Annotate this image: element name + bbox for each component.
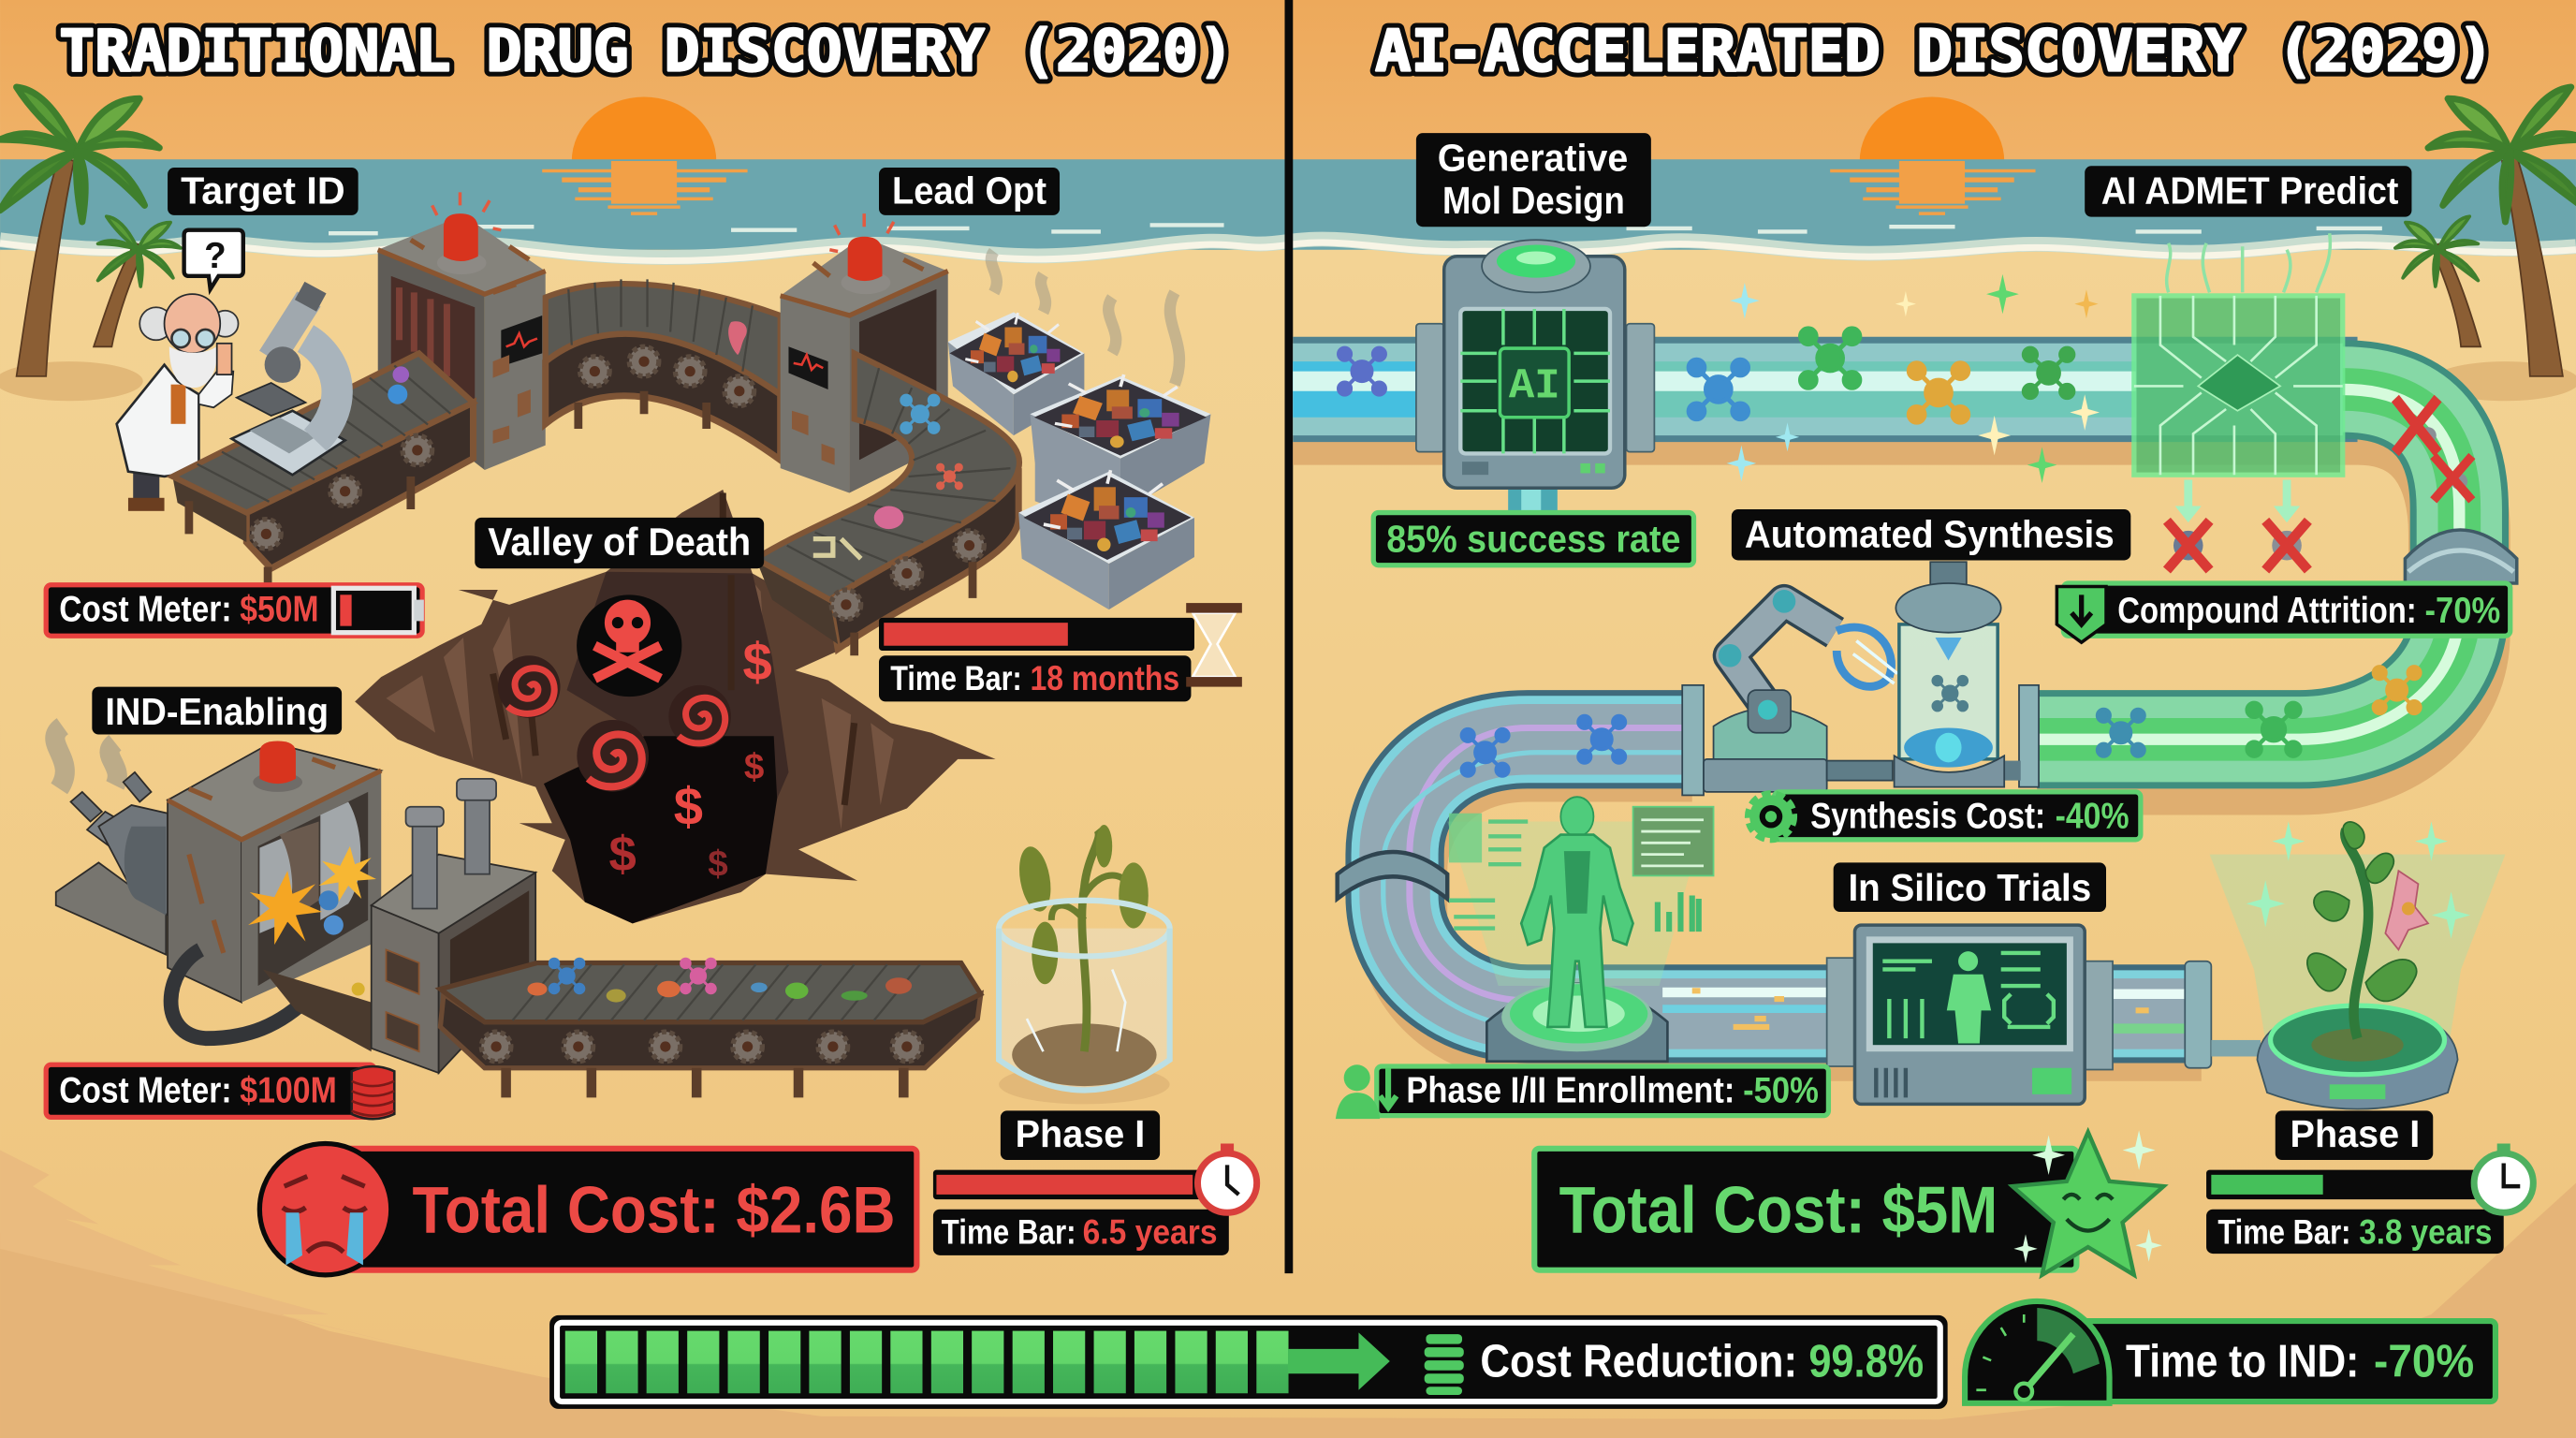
stat: synthesis cost: -40% (2056, 797, 2130, 837)
conveyor: bottom belt (440, 959, 981, 1097)
icon: dollar signs: $ (674, 777, 703, 836)
icon: dollar signs (609, 633, 772, 884)
total cost: $2.6B with crying face: Total Cost: $2.6B (413, 1172, 896, 1246)
total cost: $5M with star (1534, 1130, 2163, 1275)
label: Valley of Death: Valley of Death (488, 520, 751, 564)
panel: AI-accelerated discovery (2029) (1293, 18, 2576, 1275)
molecules: second pipe (1462, 667, 2421, 776)
time bar: 3.8 years with stopwatch (2206, 1143, 2533, 1254)
time bar: 3.8 years with stopwatch: 3.8 years (2359, 1213, 2492, 1252)
cost meter: $100M with coins (46, 1064, 394, 1119)
time bar: 18 months with hourglass: Time Bar: (890, 659, 1022, 697)
conveyor: curved third belt (755, 353, 1019, 655)
stat: compound attrition (2056, 583, 2510, 642)
label: AI ADMET Predict: AI ADMET Predict (2101, 169, 2398, 213)
icon: person with down arrow (1336, 1064, 1397, 1119)
panel: traditional drug discovery (2020) (0, 18, 1257, 1275)
time to IND stat with speedometer (1965, 1301, 2496, 1403)
machine: in silico trial monitor (1827, 925, 2113, 1104)
stat: synthesis cost (1749, 792, 2141, 840)
icon: gear (1749, 795, 1793, 838)
total cost: $2.6B with crying face (259, 1143, 916, 1275)
icon: scientist with question bubble (117, 230, 243, 511)
icon: coin stack (1425, 1334, 1464, 1395)
molecules and sparkles in pipe (1339, 274, 2100, 483)
icon: waste bins with smoke (948, 252, 1211, 609)
label: Generative Mol Design: Generative (1438, 137, 1628, 180)
icon: palm trees left (0, 87, 181, 376)
icon: speedometer (1965, 1301, 2110, 1403)
machine: IND-enabling crusher (55, 726, 535, 1073)
cost reduction progress bar: 99.8% (1808, 1337, 1924, 1387)
conveyor: first belt (172, 353, 474, 603)
stat: phase I/II enrollment: -50% (1743, 1071, 1819, 1111)
icon: microscope (232, 287, 345, 475)
pipe flanges (1338, 530, 2517, 1068)
icon: red spirals (498, 655, 731, 792)
time bar: 6.5 years with clock: 6.5 years (1083, 1213, 1218, 1252)
hologram: virtual patient (1447, 797, 1714, 1062)
stat: compound attrition: Compound Attrition: (2117, 591, 2417, 631)
icon: progress arrow (1288, 1332, 1390, 1390)
stat: synthesis cost: Synthesis Cost: (1810, 797, 2045, 837)
stat: phase I/II enrollment (1336, 1064, 1828, 1119)
cost meter: $100M with coins: $100M (240, 1071, 337, 1111)
label: Generative Mol Design (1416, 133, 1651, 227)
time bar: 6.5 years with clock: Time Bar: (942, 1213, 1076, 1252)
cost reduction progress bar: Cost Reduction: (1480, 1337, 1797, 1387)
cost meter: $50M with battery (46, 585, 424, 636)
icon: dollar signs: $ (708, 844, 728, 884)
label: In Silico Trials: In Silico Trials (1848, 866, 2091, 909)
label: Lead Opt: Lead Opt (892, 169, 1046, 213)
pipeline: glass pipe (1293, 381, 2459, 1035)
icon: shield with down arrow (2056, 587, 2106, 642)
icon: palm trees right (2395, 87, 2576, 376)
gate: lead opt machine (781, 213, 948, 493)
icon: crying face (259, 1143, 391, 1275)
title: AI-accelerated: AI-ACCELERATED DISCOVERY (2029) (1375, 18, 2494, 84)
icon: wilted plant in cracked beaker (999, 825, 1170, 1104)
cost meter: $50M with battery: $50M (240, 589, 319, 629)
title: traditional: TRADITIONAL DRUG DISCOVERY (2020) (59, 18, 1234, 84)
label: IND-Enabling: IND-Enabling (105, 690, 329, 733)
total cost: $5M with star: Total Cost: $5M (1559, 1172, 1998, 1246)
icon: smiling star (2012, 1130, 2163, 1275)
icon: dollar signs: $ (609, 827, 637, 882)
title: traditional: TRADITIONAL DRUG DISCOVERY (2020) (59, 18, 1234, 84)
icon: stopwatch red (1197, 1143, 1257, 1212)
cost reduction progress bar (552, 1318, 1945, 1406)
stat: phase I/II enrollment: Phase I/II Enrollment: (1406, 1071, 1734, 1111)
cost meter: $100M with coins: Cost Meter: (59, 1071, 232, 1111)
label: Generative Mol Design: Mol Design (1442, 179, 1625, 222)
icon: healthy plant on glowing platform (2210, 821, 2505, 1109)
icon: dollar signs: $ (743, 633, 772, 692)
label: Automated Synthesis: Automated Synthesis (1745, 512, 2115, 555)
machine: generative AI core: AI (1509, 362, 1560, 411)
time bar: 3.8 years with stopwatch: Time Bar: (2217, 1213, 2351, 1252)
chasm: valley of death (355, 490, 996, 923)
label: Target ID: Target ID (181, 169, 345, 213)
conveyor: arched second belt (546, 279, 781, 460)
time to IND stat with speedometer: Time to IND: (2126, 1337, 2359, 1387)
gate: target ID machine (378, 192, 546, 470)
icon: skull and crossbones (577, 594, 681, 697)
icon: dollar signs: $ (744, 747, 764, 787)
machine: generative AI core (1416, 240, 1654, 518)
title: AI-accelerated: AI-ACCELERATED DISCOVERY (2029) (1375, 18, 2494, 84)
machine: automated synthesis (1682, 562, 2039, 795)
time bar: 18 months with hourglass (879, 603, 1242, 701)
stat: compound attrition: -70% (2424, 591, 2500, 631)
label: Phase I left: Phase I (1016, 1112, 1145, 1155)
icon: scientist with question bubble: ? (204, 236, 227, 276)
divider between panels (1284, 0, 1293, 1273)
label: Phase I right: Phase I (2291, 1112, 2420, 1155)
icon: stopwatch green (2474, 1143, 2533, 1212)
panel: AI ADMET chip filter (2134, 233, 2343, 522)
time bar: 18 months with hourglass: 18 months (1030, 659, 1179, 697)
icon: rejected compounds (2167, 399, 2472, 570)
cost meter: $50M with battery: Cost Meter: (59, 589, 232, 629)
time to IND stat with speedometer: -70% (2374, 1337, 2474, 1387)
time bar: 6.5 years with clock (933, 1143, 1257, 1255)
label: 85% success rate: 85% success rate (1386, 518, 1680, 561)
